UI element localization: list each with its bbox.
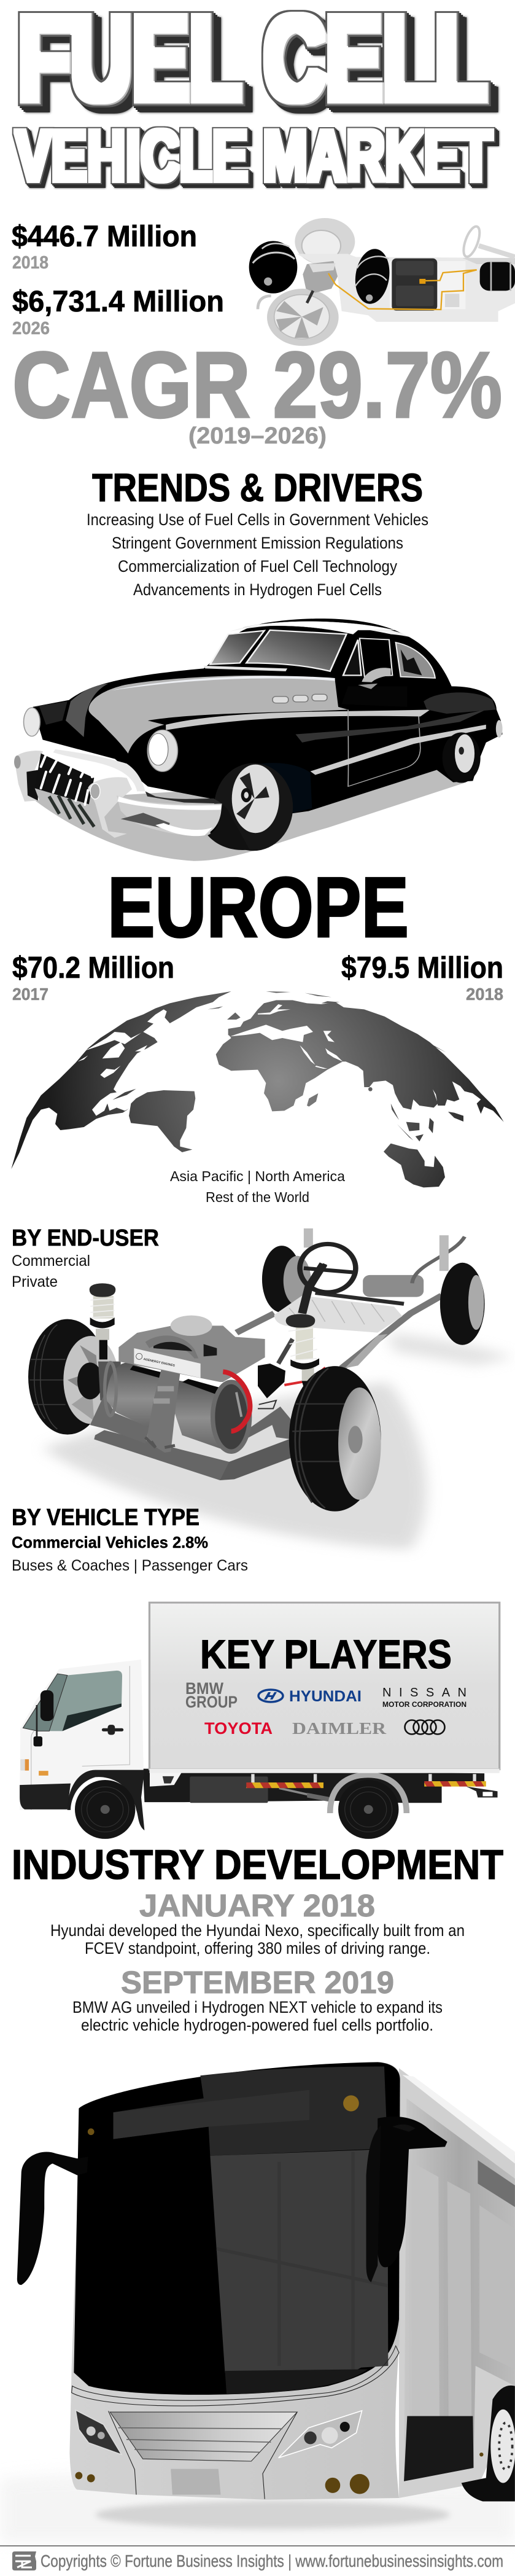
list: trends and drivers: Commercialization of Fuel Cell Technology	[118, 557, 397, 576]
development: September 2019: BMW AG unveiled i Hydrogen NEXT vehicle to expand its	[72, 1998, 443, 2016]
logo: BMW Group: BMW	[185, 1679, 223, 1698]
development: September 2019: SEPTEMBER 2019	[121, 1965, 394, 2000]
heading: Europe: EUROPE	[107, 860, 409, 955]
end-user segment	[12, 1225, 159, 1290]
image: world globe map	[11, 991, 504, 1187]
image: vintage black car	[14, 619, 503, 861]
list: trends and drivers: Increasing Use of Fuel Cells in Government Vehicles	[87, 510, 428, 529]
title: Fuel Cell Vehicle Market	[15, 0, 492, 197]
end-user segment: Commercial	[12, 1252, 90, 1270]
market value 2018: $446.7 Million	[12, 221, 197, 253]
image: fuel cell chassis with hydrogen tanks	[249, 218, 515, 346]
list: other regions	[170, 1168, 345, 1205]
heading: trends and drivers: TRENDS & DRIVERS	[92, 466, 423, 510]
Europe value 2017	[12, 951, 174, 1004]
development: September 2019: electric vehicle hydrogen-powered fuel cells portfolio.	[81, 2016, 433, 2034]
vehicle type segment: Commercial Vehicles 2.8%	[12, 1533, 208, 1551]
image: electric vehicle chassis with motor: AGENERGY ENGINES	[143, 1357, 176, 1368]
logo: Nissan Motor Corporation	[382, 1686, 467, 1709]
market value 2026: $6,731.4 Million	[12, 286, 224, 318]
Europe value 2018: $79.5 Million	[341, 951, 503, 985]
image: electric vehicle chassis with motor	[28, 1228, 513, 1549]
Europe value 2017: $70.2 Million	[12, 951, 174, 985]
logo: BMW Group: GROUP	[185, 1693, 238, 1711]
Europe value 2018: 2018	[466, 985, 503, 1004]
list: other regions: Rest of the World	[206, 1189, 309, 1205]
development: January 2018	[50, 1888, 465, 1957]
logo: Daimler: DAIMLER	[292, 1719, 387, 1738]
list: other regions: Asia Pacific | North America	[170, 1168, 345, 1184]
development: January 2018: JANUARY 2018	[139, 1888, 375, 1923]
logo: Nissan Motor Corporation: MOTOR CORPORATION	[382, 1700, 467, 1709]
market value 2026	[12, 286, 224, 338]
logo: Toyota: TOYOTA	[204, 1719, 273, 1738]
list: trends and drivers: Stringent Government Emission Regulations	[112, 534, 403, 552]
market value 2026: 2026	[12, 319, 50, 338]
Europe value 2018	[341, 951, 503, 1004]
vehicle type segment	[12, 1505, 248, 1574]
market value 2018	[12, 221, 197, 273]
list: trends and drivers: Advancements in Hydrogen Fuel Cells	[133, 580, 382, 599]
logo: Hyundai: HYUNDAI	[289, 1688, 362, 1705]
logo: Audi rings	[405, 1720, 444, 1735]
image: delivery truck	[20, 1602, 500, 1839]
heading: key players: KEY PLAYERS	[200, 1631, 452, 1677]
logo: Nissan Motor Corporation: NISSAN	[382, 1686, 467, 1700]
logos: key players	[185, 1679, 467, 1738]
development: January 2018: FCEV standpoint, offering 380 miles of driving range.	[85, 1939, 430, 1957]
icon: Fortune Business Insights logo	[12, 2551, 36, 2570]
footer: copyright	[12, 2551, 503, 2570]
Europe value 2017: 2017	[12, 985, 48, 1004]
development: September 2019	[72, 1965, 443, 2034]
image: front of city bus	[0, 2062, 515, 2546]
vehicle type segment: Buses & Coaches | Passenger Cars	[12, 1557, 248, 1574]
end-user segment: Private	[12, 1273, 58, 1290]
logo: Hyundai	[258, 1688, 362, 1705]
logo: BMW Group	[185, 1679, 238, 1711]
list: trends and drivers	[87, 510, 428, 599]
end-user segment: BY END-USER	[12, 1225, 159, 1251]
development: January 2018: Hyundai developed the Hyundai Nexo, specifically built from an	[50, 1921, 465, 1940]
CAGR figure: (2019–2026)	[188, 423, 327, 449]
market value 2018: 2018	[12, 253, 48, 273]
vehicle type segment: BY VEHICLE TYPE	[12, 1505, 199, 1531]
